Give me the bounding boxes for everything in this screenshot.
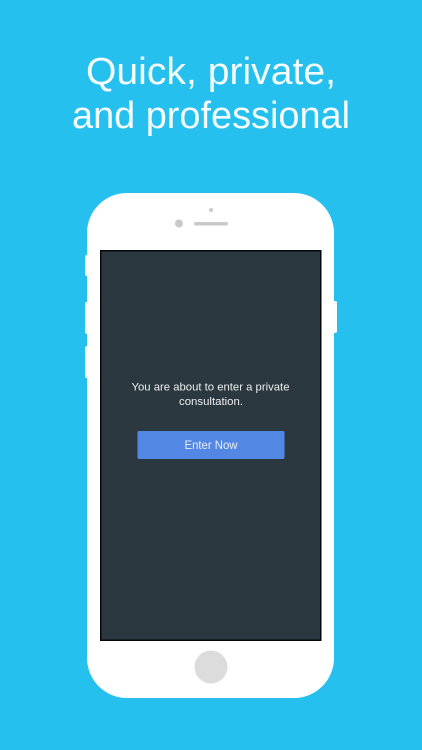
title: Quick, private, <box>86 51 336 93</box>
phone <box>85 193 337 698</box>
consultation message: You are about to enter a private <box>132 382 290 394</box>
enter now button <box>138 431 284 459</box>
consultation message: consultation. <box>179 396 243 408</box>
enter now button: Enter Now <box>184 440 238 452</box>
phone body <box>87 193 334 698</box>
title: and professional <box>72 95 350 137</box>
sensor dot <box>209 208 213 212</box>
screen <box>101 251 321 640</box>
camera <box>175 220 183 228</box>
speaker <box>194 222 228 226</box>
side buttons <box>85 255 337 378</box>
consultation message <box>132 382 290 408</box>
title <box>72 51 350 137</box>
home button <box>194 650 228 684</box>
